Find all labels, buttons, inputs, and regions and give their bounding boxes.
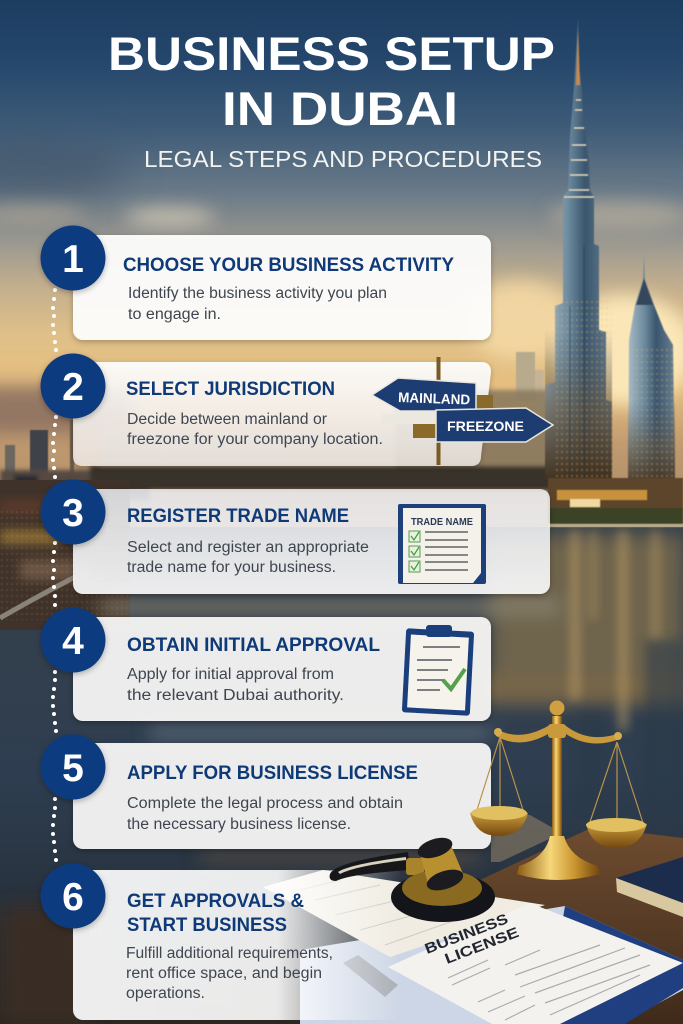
number badge 1: 1	[62, 238, 84, 281]
card 6	[73, 870, 403, 1020]
step 6 description	[126, 945, 333, 1002]
notebook	[616, 857, 683, 917]
card 4	[73, 617, 491, 721]
card 3	[73, 489, 550, 594]
step 1	[40, 226, 491, 340]
icon: clipboard with check	[402, 625, 474, 716]
card 5	[73, 743, 491, 849]
title: BUSINESS SETUP	[108, 27, 555, 80]
step 6 heading: GET APPROVALS &	[127, 890, 304, 912]
subtitle: LEGAL STEPS AND PROCEDURES	[144, 146, 542, 172]
desk and documents	[263, 815, 683, 1024]
number badge 5: 5	[62, 747, 84, 790]
step 2 heading: SELECT JURISDICTION	[126, 378, 335, 400]
documents: BUSINESS	[423, 911, 511, 958]
number badge 6: 6	[62, 876, 84, 919]
step 2 description: freezone for your company location.	[127, 431, 383, 448]
scales of justice	[470, 700, 647, 880]
icon: trade name document	[398, 504, 486, 584]
step 6 description: Fulfill additional requirements,	[126, 945, 333, 962]
card 2	[73, 362, 491, 466]
number badge 4: 4	[62, 620, 84, 663]
step 6 heading	[127, 890, 304, 936]
water	[0, 527, 683, 1024]
number badge 5	[40, 734, 106, 800]
title	[108, 27, 555, 135]
number badge 1	[40, 226, 106, 290]
step 4 heading: OBTAIN INITIAL APPROVAL	[127, 634, 380, 656]
number badge 3	[40, 480, 106, 544]
step 2 description: Decide between mainland or	[127, 411, 327, 428]
step 1 description	[128, 285, 387, 323]
step 1 description: to engage in.	[128, 306, 221, 323]
icon: signpost: MAINLAND	[398, 389, 470, 408]
number badge 2: 2	[62, 366, 84, 409]
step 4 description	[127, 666, 344, 704]
icon: signpost: FREEZONE	[447, 418, 524, 434]
timeline dots	[51, 288, 58, 862]
icon: signpost	[372, 357, 553, 465]
step 6 description: operations.	[126, 985, 205, 1002]
step 2 description	[127, 411, 383, 448]
step 6 heading: START BUSINESS	[127, 914, 287, 936]
step 6 description: rent office space, and begin	[126, 965, 322, 982]
right tower	[628, 255, 675, 490]
step 3 description	[127, 539, 369, 576]
step 1 description: Identify the business activity you plan	[128, 285, 387, 302]
step 4 description: Apply for initial approval from	[127, 666, 334, 683]
title: IN DUBAI	[222, 82, 458, 135]
step 2	[40, 354, 553, 466]
card 1	[73, 235, 491, 340]
step 3 description: trade name for your business.	[127, 559, 336, 576]
desk	[420, 827, 683, 1024]
step 5	[40, 734, 491, 849]
step 6	[40, 864, 403, 1020]
step 3 description: Select and register an appropriate	[127, 539, 369, 556]
gavel	[330, 834, 495, 922]
waterfront	[548, 478, 683, 527]
step 5 heading: APPLY FOR BUSINESS LICENSE	[127, 762, 418, 784]
step 3 heading: REGISTER TRADE NAME	[127, 505, 349, 527]
number badge 3: 3	[62, 492, 84, 535]
step 1 heading: CHOOSE YOUR BUSINESS ACTIVITY	[123, 254, 454, 276]
step 5 description	[127, 795, 403, 833]
step 3	[40, 480, 550, 594]
documents	[263, 870, 683, 1024]
step 4 description: the relevant Dubai authority.	[127, 687, 344, 704]
step 5 description: the necessary business license.	[127, 816, 351, 833]
number badge 4	[40, 608, 106, 672]
step 5 description: Complete the legal process and obtain	[127, 795, 403, 812]
documents: LICENSE	[443, 925, 522, 968]
number badge 6	[40, 864, 106, 928]
Burj Khalifa	[545, 18, 612, 480]
step 4	[40, 608, 491, 721]
icon: trade name document: TRADE NAME	[411, 516, 473, 528]
number badge 2	[40, 354, 106, 418]
